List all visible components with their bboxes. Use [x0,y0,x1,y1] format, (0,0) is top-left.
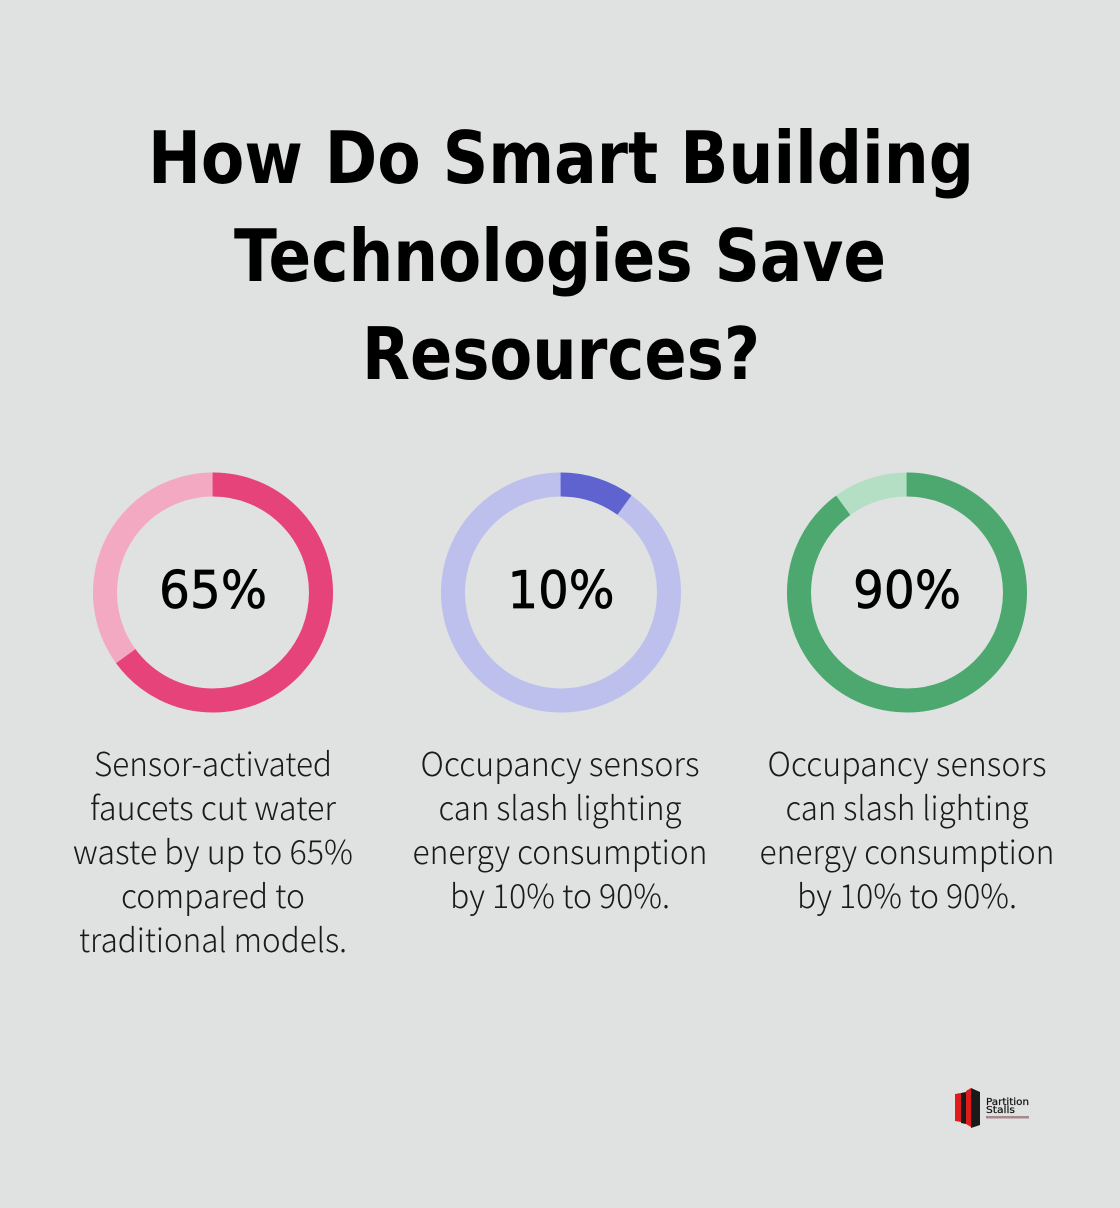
panel: occupancy sensors 90% [760,484,1054,918]
title: Technologies Save [234,214,886,298]
donut chart: 90% [799,484,1015,700]
description: lighting 90%: energy consumption [760,826,1054,874]
description: lighting 90%: can slash lighting [786,782,1029,830]
description: faucets: waste by up to 65% [73,826,353,874]
description: lighting 10%: energy consumption [412,826,708,874]
donut chart: 10%: 10% [508,561,614,621]
description: faucets: faucets cut water [90,782,336,830]
description: lighting 10%: by 10% to 90%. [450,870,670,918]
panel: occupancy sensors 10% [412,484,708,918]
description: lighting 10%: Occupancy sensors [420,738,700,786]
description: lighting 90%: by 10% to 90%. [797,870,1017,918]
logo: Partition Stalls [955,1088,1029,1128]
title: How Do Smart Building [148,116,974,200]
donut chart: 10% [453,484,669,700]
description: lighting 90%: Occupancy sensors [768,738,1046,786]
description: faucets: compared to [121,870,305,918]
title: Resources? [362,312,760,396]
donut chart: 65% [105,484,321,700]
description: faucets: traditional models. [79,914,347,962]
description: faucets: Sensor-activated [94,738,332,786]
donut chart: 90%: 90% [853,561,961,621]
panel: sensor-activated faucets [73,484,353,962]
description: lighting 90% [760,738,1054,918]
title [148,116,974,396]
description: lighting 10%: can slash lighting [438,782,682,830]
logo: Partition Stalls: Stalls [986,1105,1015,1116]
description: lighting 10% [412,738,708,918]
donut chart: 65%: 65% [159,561,267,621]
description: faucets [73,738,353,962]
logo: Partition Stalls: Partition [986,1097,1029,1108]
